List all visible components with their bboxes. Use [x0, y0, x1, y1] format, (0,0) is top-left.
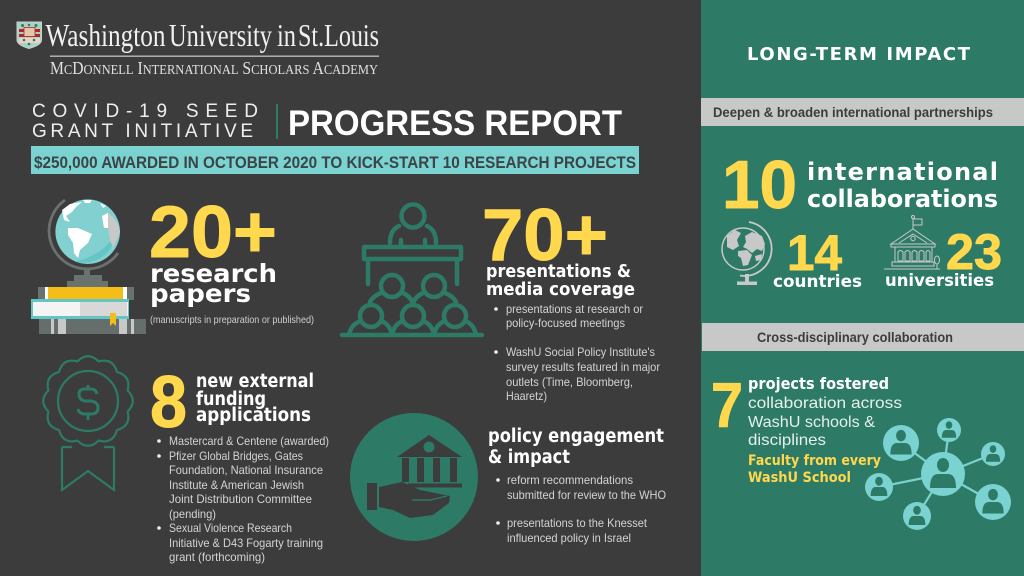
list: presentations: policy-focused meetings [506, 316, 625, 330]
logo: Washington University in St. Louis: University [169, 17, 272, 53]
icon: globe on books [31, 199, 146, 334]
list: funding applications: Foundation, National Insurance [169, 463, 323, 477]
list: funding applications: Mastercard & Centene (awarded) [169, 434, 329, 448]
list: funding applications [157, 434, 329, 564]
stat: 20+: 20+ [149, 192, 277, 273]
section bar: international partnerships: Deepen & broaden international partnerships [713, 104, 993, 120]
stat: 23 universities [885, 224, 1002, 291]
heading: policy engagement & impact: policy engagement [488, 426, 664, 447]
heading: research papers [150, 259, 277, 308]
icon: collaboration network [865, 418, 1011, 530]
section bar: cross-disciplinary [702, 323, 1024, 351]
logo: Washington University in St. Louis: Washington [46, 17, 166, 53]
section bar: cross-disciplinary: Cross-disciplinary collaboration [757, 329, 953, 345]
section bar: international partnerships [701, 98, 1024, 126]
panel: presentations and media [342, 195, 660, 403]
icon: university shield [17, 22, 42, 48]
text: projects fostered: disciplines [748, 432, 826, 449]
list: policy engagement: influenced policy in Israel [507, 531, 631, 545]
heading: international collaborations [807, 158, 998, 213]
stat: 10: 10 [722, 147, 797, 223]
heading: long-term impact: LONG-TERM IMPACT [747, 44, 971, 65]
list: policy engagement: submitted for review to the WHO [507, 488, 666, 502]
heading: new external funding applications [196, 371, 314, 426]
text: projects fostered: WashU schools & [748, 414, 875, 431]
heading: presentations & media coverage [486, 261, 635, 300]
list: funding applications: Joint Distribution Committee [169, 492, 312, 506]
heading: policy engagement & impact [488, 426, 664, 468]
list: presentations: outlets (Time, Bloomberg, [506, 375, 633, 389]
icon: government building on hand [350, 413, 478, 541]
heading: research papers: papers [150, 279, 251, 308]
list: presentations: WashU Social Policy Institute's [506, 345, 655, 359]
list: funding applications: (pending) [169, 507, 216, 521]
text: projects fostered: projects fostered [748, 374, 889, 393]
stat: 14 countries: 14 [787, 225, 842, 281]
heading: presentations & media coverage: media coverage [486, 279, 635, 300]
panel: policy engagement [350, 413, 666, 545]
logo: Washington University in St. Louis: St.Louis [298, 17, 379, 53]
heading: international collaborations: international [807, 158, 998, 186]
heading: presentations & media coverage: presentations & [486, 261, 631, 282]
stat: 14 countries: countries [773, 272, 862, 292]
stat: 23 universities: universities [885, 271, 994, 291]
list: policy engagement: reform recommendations [507, 473, 633, 487]
stat: 70+: 70+ [482, 195, 608, 276]
banner: award amount [31, 146, 639, 174]
panel: external funding [43, 356, 329, 564]
list: funding applications: Pfizer Global Bridges, Gates [169, 449, 303, 463]
list: policy engagement [496, 473, 666, 545]
heading: new external funding applications: new external [196, 371, 314, 392]
heading: new external funding applications: funding [196, 389, 266, 410]
icon: dollar award ribbon [43, 356, 133, 490]
logo: Washington University in St. Louis: MCDONNELL INTERNATIONAL SCHOLARS ACADEMY [50, 58, 378, 78]
logo: Washington University in St. Louis: in [277, 17, 296, 53]
list: funding applications: Sexual Violence Research [169, 521, 292, 535]
title: Covid-19 seed grant initiative [32, 101, 258, 142]
heading: new external funding applications: applications [196, 405, 311, 426]
heading: policy engagement & impact: & impact [488, 447, 570, 468]
text: projects fostered: collaboration across [748, 395, 902, 412]
list: funding applications: grant (forthcoming) [169, 550, 265, 564]
panel: long-term impact [701, 0, 1024, 576]
stat: 8: 8 [150, 362, 187, 443]
stat: 7: 7 [711, 371, 743, 441]
list: presentations: presentations at research or [506, 302, 643, 316]
text: projects fostered: Faculty from every [748, 453, 881, 469]
title: progress report: PROGRESS REPORT [288, 104, 622, 143]
title: Covid-19 seed grant initiative: GRANT INITIATIVE [32, 121, 253, 142]
panel: research papers [31, 192, 314, 334]
banner: award amount: $250,000 AWARDED IN OCTOBER 2020 TO KICK-START 10 RESEARCH PROJECTS [34, 154, 636, 172]
heading: research papers: research [150, 259, 277, 288]
list: funding applications: Initiative & D43 Fogarty training [169, 536, 323, 550]
list: policy engagement: presentations to the Knesset [507, 516, 648, 530]
icon: world globe [722, 222, 772, 285]
text: projects fostered: WashU School [748, 470, 851, 486]
note: manuscripts: (manuscripts in preparation or published) [150, 314, 314, 326]
logo: Washington University in St. Louis [17, 17, 379, 78]
heading: international collaborations: collaborations [807, 185, 998, 213]
list: funding applications: Institute & American Jewish [169, 478, 304, 492]
icon: presenter and audience [342, 204, 482, 335]
icon: university building [884, 216, 940, 269]
text: projects fostered [748, 374, 902, 486]
stat: 23 universities: 23 [946, 224, 1002, 280]
title: Covid-19 seed grant initiative: COVID-19 SEED [32, 101, 258, 122]
list: presentations: survey results featured in major [506, 360, 660, 374]
list: presentations [494, 302, 660, 403]
list: presentations: Haaretz) [506, 389, 547, 403]
stat: 14 countries [773, 225, 862, 292]
